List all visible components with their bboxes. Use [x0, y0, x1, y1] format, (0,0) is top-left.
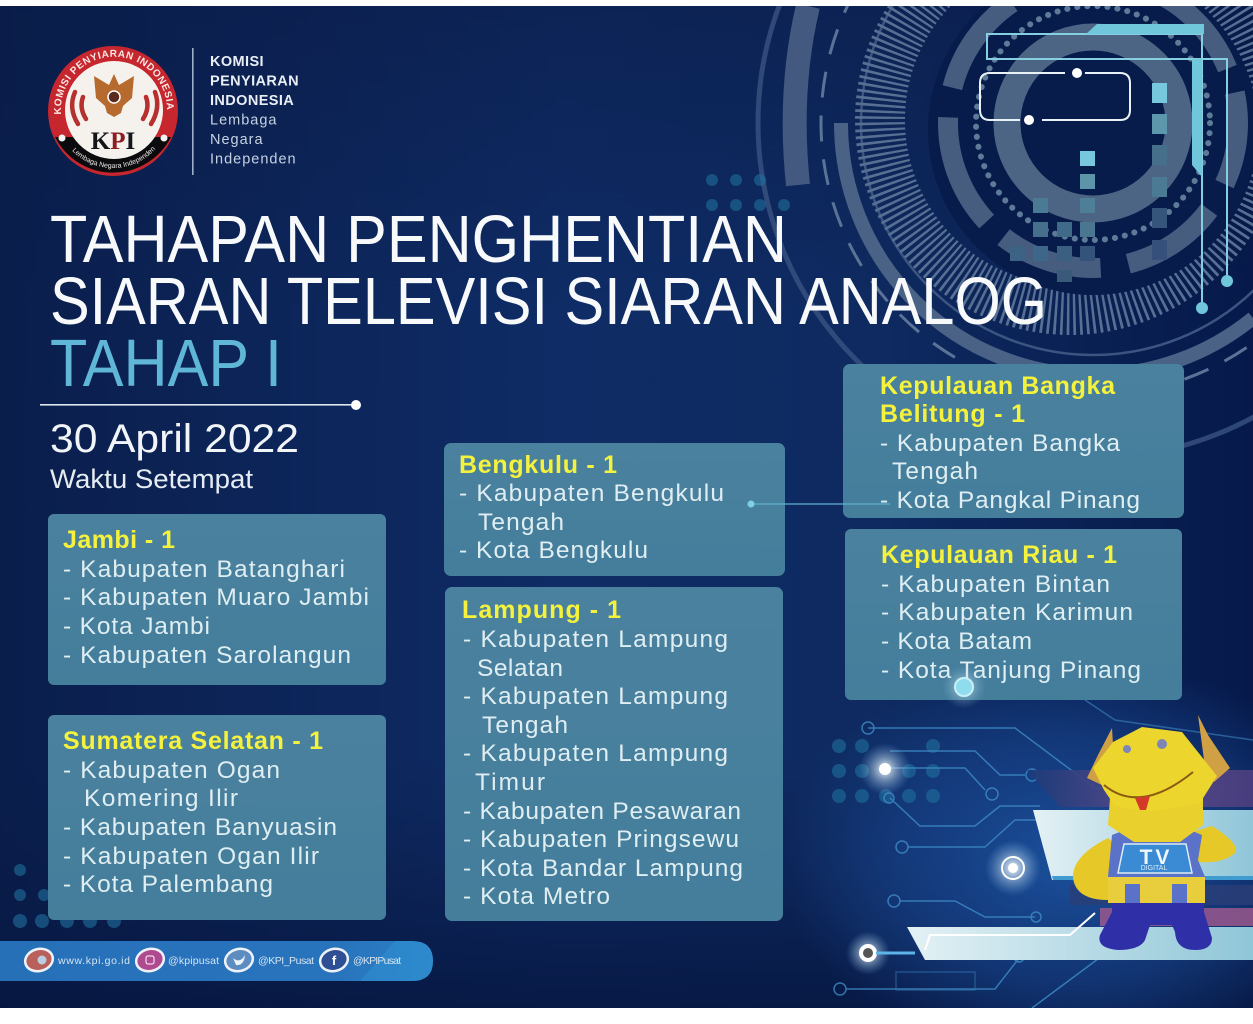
logo divider [192, 48, 194, 175]
white rounded connector box [980, 68, 1130, 125]
title [50, 202, 1047, 401]
panel: Lampung [445, 587, 783, 921]
glow node on panel edge [942, 665, 986, 709]
logo: KPI: KOMISI PENYIARAN INDONESIA [54, 50, 174, 114]
panel: Kepulauan Bangka Belitung: Tengah [892, 458, 978, 485]
panel: Lampung: - Kota Bandar Lampung [463, 855, 743, 882]
panel: Bengkulu: - Kota Bengkulu [459, 537, 648, 564]
title: TAHAPAN PENGHENTIAN [50, 202, 787, 277]
panel: Lampung: Selatan [477, 655, 563, 682]
title: SIARAN TELEVISI SIARAN ANALOG [50, 264, 1047, 339]
panel: Kepulauan Bangka Belitung: - Kabupaten Bangka [880, 430, 1120, 457]
panel: Sumatera Selatan: Komering Ilir [84, 785, 238, 812]
organisation name: PENYIARAN [210, 74, 299, 90]
mascot chest badge: DIGITAL [1141, 865, 1167, 872]
icon: facebook: f [332, 953, 337, 968]
website label: www.kpi.go.id [57, 955, 130, 967]
panel: Kepulauan Riau [845, 529, 1182, 700]
cyan frame with pin lines [987, 24, 1233, 314]
organisation name: KOMISI [210, 54, 264, 70]
panel: Kepulauan Riau: - Kabupaten Bintan [881, 571, 1110, 598]
glowing nodes [846, 743, 1041, 975]
panel: Kepulauan Bangka Belitung [843, 364, 1184, 518]
logo garuda [94, 74, 134, 117]
panel: Kepulauan Riau: - Kabupaten Karimun [881, 599, 1133, 626]
panel: Kepulauan Riau: - Kota Batam [881, 628, 1032, 655]
organisation name: INDONESIA [210, 93, 294, 109]
panel: Kepulauan Riau: - Kota Tanjung Pinang [881, 657, 1141, 684]
twitter label: @KPI_Pusat [258, 955, 314, 967]
panel: Sumatera Selatan: - Kabupaten Banyuasin [63, 814, 337, 841]
panel: Lampung: - Kabupaten Lampung [463, 626, 728, 653]
mascot antennae [1087, 715, 1230, 786]
dot grids [13, 174, 940, 928]
panel: Lampung: Tengah [482, 712, 568, 739]
footer social bar [0, 941, 433, 981]
mascot right arm [1192, 826, 1236, 862]
concentric tech rings [758, 0, 1253, 458]
panel: Lampung: - Kota Metro [463, 883, 610, 910]
mascot chest badge [1118, 844, 1192, 873]
panel: Kepulauan Bangka Belitung: Belitung - 1 [880, 400, 1025, 428]
panel: Bengkulu [444, 443, 785, 576]
panel: Kepulauan Bangka Belitung: - Kota Pangkal Pinang [880, 487, 1140, 514]
icon: twitter [223, 946, 255, 974]
panel: Bengkulu: - Kabupaten Bengkulu [459, 480, 724, 507]
panel: Jambi: - Kota Jambi [63, 613, 210, 640]
panel: Sumatera Selatan: - Kota Palembang [63, 871, 273, 898]
panel: Lampung: - Kabupaten Pringsewu [463, 826, 739, 853]
date: 30 April 2022 [50, 417, 299, 461]
mascot: TV Digital [1073, 715, 1236, 950]
icon: website [23, 946, 55, 974]
circuit lines [834, 700, 1253, 1008]
panel: Lampung: Timur [475, 769, 545, 796]
panel: Sumatera Selatan: - Kabupaten Ogan Ilir [63, 843, 319, 870]
mascot torso [1108, 826, 1205, 903]
mascot chest badge: TV [1140, 846, 1172, 869]
panel: Jambi [48, 514, 386, 685]
icon: instagram [134, 946, 166, 974]
logo stars [58, 134, 168, 142]
panel: Sumatera Selatan [48, 715, 386, 920]
logo: KPI: Lembaga Negara Independen [72, 147, 156, 170]
panel: Sumatera Selatan: - Kabupaten Ogan [63, 757, 280, 784]
panel: Jambi: - Kabupaten Sarolangun [63, 642, 351, 669]
panel: Sumatera Selatan: Sumatera Selatan - 1 [63, 727, 323, 755]
panel: Lampung: - Kabupaten Pesawaran [463, 798, 741, 825]
purple strips [1027, 770, 1253, 926]
icon: facebook [318, 946, 350, 974]
panel: Bengkulu: Tengah [478, 509, 564, 536]
connector between panels [748, 500, 890, 508]
pixel bars [1010, 83, 1167, 282]
local time note: Waktu Setempat [50, 464, 254, 494]
panel: Lampung: Lampung - 1 [462, 596, 621, 624]
facebook label: @KPIPusat [353, 955, 401, 967]
panel: Jambi: - Kabupaten Muaro Jambi [63, 584, 369, 611]
panel: Jambi: Jambi - 1 [63, 526, 175, 554]
panel: Kepulauan Riau: Kepulauan Riau - 1 [881, 541, 1117, 569]
panel: Lampung: - Kabupaten Lampung [463, 683, 728, 710]
bottom white band [0, 1008, 1253, 1024]
light strips [907, 810, 1253, 960]
organisation name: Negara [210, 132, 264, 148]
panel: Bengkulu: Bengkulu - 1 [459, 451, 617, 479]
panel: Kepulauan Bangka Belitung: Kepulauan Bangka [880, 372, 1116, 400]
mascot legs [1099, 898, 1212, 950]
organisation name [210, 54, 299, 168]
top white band mask [0, 0, 1253, 6]
mascot head [1093, 727, 1217, 812]
instagram label: @kpipusat [168, 955, 219, 967]
date rule [40, 400, 361, 410]
organisation name: Independen [210, 152, 297, 168]
panel: Lampung: - Kabupaten Lampung [463, 740, 728, 767]
panel: Jambi: - Kabupaten Batanghari [63, 556, 345, 583]
title: TAHAP I [50, 326, 282, 401]
logo: KPI: KPI [91, 128, 135, 155]
organisation name: Lembaga [210, 112, 277, 128]
mascot neck [1108, 798, 1203, 842]
mascot left arm [1073, 838, 1120, 900]
logo: KPI [48, 46, 178, 176]
